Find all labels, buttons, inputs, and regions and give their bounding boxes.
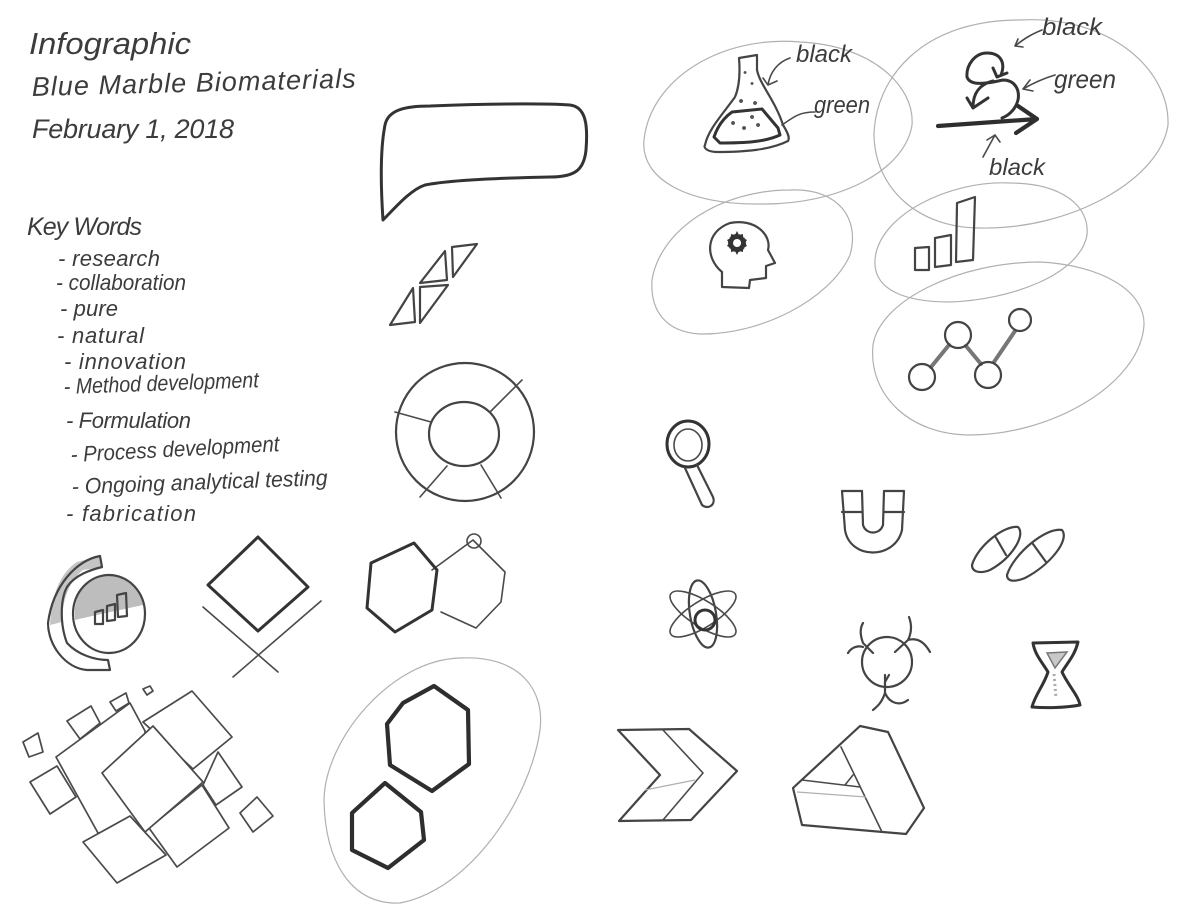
key words list: - Process development (70, 431, 281, 467)
key words list: - Ongoing analytical testing (71, 465, 329, 499)
ellipse: two hexagons (324, 658, 541, 903)
ellipse: growth icon: green (1054, 64, 1116, 94)
title block (29, 26, 356, 144)
icon: double chevron arrow (618, 729, 737, 821)
ellipse: growth icon: black (989, 154, 1047, 180)
icon: triangle ribbon (793, 726, 924, 834)
title block: Blue Marble Biomaterials (31, 64, 356, 102)
icon: biohazard circle (848, 617, 930, 710)
key words list: - fabrication (66, 501, 196, 526)
icon: double hexagon (367, 534, 505, 632)
icon: magnifying glass (667, 421, 714, 507)
title block: Infographic (29, 26, 192, 61)
icon: capsules (972, 527, 1064, 581)
key words list (27, 213, 329, 526)
ellipse: molecule chain icon (873, 262, 1144, 435)
icon: scattered squares (23, 686, 273, 883)
key words list: - Formulation (66, 408, 191, 433)
ellipse: flask icon: green (814, 92, 870, 119)
icon: diamond with chevron cross (203, 537, 321, 677)
icon: magnet (842, 491, 904, 552)
key words list: Key Words (27, 213, 142, 241)
ellipse: flask icon (644, 41, 912, 204)
icon: speech bubble (381, 104, 587, 220)
icon: segmented ring (395, 363, 534, 501)
ellipse: growth icon: black (1042, 14, 1104, 41)
ellipse: head with gear icon (652, 190, 852, 334)
key words list: - natural (57, 323, 145, 348)
icon: triangles slash (390, 244, 477, 325)
key words list: - pure (60, 296, 118, 321)
key words list: - innovation (64, 349, 186, 374)
icon: hourglass (1032, 642, 1080, 708)
title block: February 1, 2018 (32, 114, 234, 144)
key words list: - collaboration (56, 270, 186, 295)
icon: half circle chart (48, 556, 145, 670)
icon: atom (664, 578, 742, 650)
ellipse: growth icon (874, 14, 1168, 228)
key words list: - Method development (63, 367, 260, 399)
ellipse: flask icon: black (796, 41, 854, 68)
ellipse: bar chart icon (875, 183, 1087, 302)
key words list: - research (58, 246, 160, 271)
